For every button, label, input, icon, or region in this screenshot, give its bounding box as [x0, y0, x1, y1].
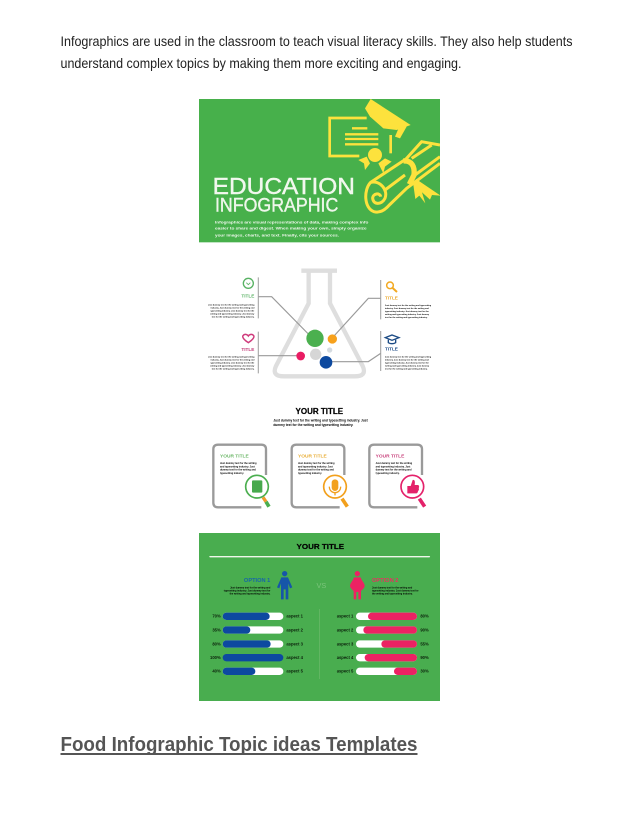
label: pink title [208, 347, 255, 371]
heading description: dummy text for the writing and typesetting industry. [273, 423, 353, 427]
card: green: dummy text for the writing and [220, 469, 256, 472]
percent and aspect labels: option 1: 70% [212, 614, 221, 619]
percent and aspect labels: option 2: 55% [420, 641, 429, 646]
comparison bars [210, 609, 429, 679]
percent and aspect labels: option 2: aspect 5 [337, 669, 354, 674]
percent and aspect labels: option 1: 40% [212, 669, 221, 674]
label: green title: typesetting industry. Just dummy text for the [211, 309, 255, 312]
divider [209, 556, 430, 557]
percent and aspect labels: option 1: aspect 5 [286, 669, 304, 674]
bars: option 2 [356, 613, 417, 675]
card: orange: Just dummy text for the writing [298, 462, 335, 465]
label: pink title: typesetting industry. Just dummy text for the [211, 362, 255, 365]
option 1 label: typesetting industry. Just dummy text for [224, 589, 270, 592]
icon: rosette [358, 148, 392, 173]
card: green: YOUR TITLE [220, 453, 249, 459]
label: orange title: typesetting industry. Just dummy text for the [385, 310, 430, 313]
bars: option 1 [223, 613, 283, 675]
option 2 label: Just dummy text for the writing and [372, 586, 413, 589]
title: education: EDUCATION [213, 173, 355, 199]
flask outline [275, 271, 364, 376]
label: green title: text for the writing and typesetting industry. [212, 315, 255, 318]
label: orange title: text for the writing and typesetting industry. [385, 316, 428, 319]
panel: education infographic banner [199, 99, 441, 242]
percent and aspect labels: option 1: 35% [212, 627, 221, 632]
intro text [60, 33, 572, 71]
connector lines [258, 277, 381, 373]
intro text: Infographics are used in the classroom to teach visual literacy skills. They also help students [60, 33, 572, 49]
percent and aspect labels: option 2 [337, 614, 429, 674]
card: pink [369, 445, 425, 507]
banner description: your images, charts, and text. Finally, cite your sources. [215, 233, 339, 237]
icon: certificate [330, 118, 391, 156]
label: green title [208, 294, 255, 318]
label: blue title: writing and typesetting industry. Just dummy [385, 364, 430, 367]
card: orange [292, 445, 347, 507]
subtitle: infographic: INFOGRAPHIC [215, 195, 338, 217]
percent and aspect labels: option 2: aspect 1 [337, 614, 354, 619]
banner description: easier to share and digest. When making your own, simply organize [215, 227, 367, 231]
label: green title: industry. Just dummy text for the writing and [211, 306, 255, 309]
intro text: understand complex topics by making them more exciting and engaging. [60, 55, 462, 71]
label: orange title: Just dummy text for the writing and typesetting [385, 304, 432, 307]
option 2 label [372, 578, 419, 595]
icon: graduation cap [365, 99, 411, 138]
comparison header [209, 542, 430, 599]
icon: blue graduation cap [385, 335, 399, 344]
heading: food infographic topic ideas templates: Food Infographic Topic ideas Templates [60, 733, 418, 756]
label: blue title: industry. Just dummy text for the writing and [385, 358, 429, 361]
option 2 label: the writing and typesetting industry. [372, 592, 413, 595]
card: pink: Just dummy text for the writing [376, 462, 413, 465]
percent and aspect labels: option 2: 90% [420, 655, 429, 660]
percent and aspect labels: option 1: 80% [212, 641, 221, 646]
panel: comparison option 1 vs option 2 [199, 533, 440, 701]
icon: green clock [243, 278, 253, 288]
option 1 label [224, 578, 271, 595]
heading description: Just dummy text for the writing and typesetting industry. Just [273, 419, 369, 423]
label: blue title: text for the writing and typesetting industry. [385, 367, 428, 370]
card: green: and typesetting industry. Just [220, 465, 255, 468]
option 1 label: the writing and typesetting industry. [230, 592, 271, 595]
label: orange title: industry. Just dummy text for the writing and [385, 307, 429, 310]
card: green: typesetting industry. [220, 472, 244, 475]
label: green title: Just dummy text for the writing and typesetting [208, 303, 255, 306]
card: pink: YOUR TITLE [376, 453, 405, 459]
heading: your title: YOUR TITLE [296, 542, 344, 551]
card: orange: and typesetting industry. Just [298, 465, 333, 468]
card: orange: dummy text for the writing and [298, 469, 334, 472]
percent and aspect labels: option 2: aspect 4 [337, 655, 354, 660]
flask bubbles [296, 330, 337, 369]
center divider [318, 609, 321, 679]
label: blue title: Just dummy text for the writing and typesetting [385, 355, 432, 358]
label: pink title: industry. Just dummy text for the writing and [211, 359, 255, 362]
panel: flask infographic [208, 271, 432, 376]
percent and aspect labels: option 1 [210, 614, 304, 674]
option 2 label: OPTION 2 [372, 578, 398, 584]
card: pink: dummy text for the writing and [376, 469, 412, 472]
icon: blue man [277, 571, 292, 599]
card: green [213, 445, 269, 507]
option 1 label: Just dummy text for the writing and [230, 586, 271, 589]
percent and aspect labels: option 1: 100% [210, 655, 221, 660]
percent and aspect labels: option 2: aspect 2 [337, 627, 354, 632]
label: green title: writing and typesetting industry. Just dummy [210, 312, 255, 315]
heading description [273, 419, 369, 427]
banner description: Infographics are visual representations of data, making complex info [215, 221, 369, 225]
percent and aspect labels: option 2: 30% [420, 669, 429, 674]
percent and aspect labels: option 1: aspect 1 [286, 614, 304, 619]
percent and aspect labels: option 2: 80% [420, 614, 429, 619]
vs label: VS [316, 581, 326, 590]
banner description [215, 221, 369, 237]
label: orange title [385, 295, 432, 319]
percent and aspect labels: option 2: aspect 3 [337, 641, 354, 646]
card: pink: typesetting industry. [376, 472, 400, 475]
icon: diploma scroll [366, 142, 441, 212]
card: pink: and typesetting industry. Just [376, 465, 411, 468]
label: blue title: typesetting industry. Just dummy text for the [385, 361, 430, 364]
label: orange title: writing and typesetting industry. Just dummy [385, 313, 430, 316]
label: pink title: Just dummy text for the writing and typesetting [208, 356, 255, 359]
card: green: Just dummy text for the writing [220, 462, 257, 465]
option 1 label: OPTION 1 [244, 578, 270, 584]
percent and aspect labels: option 2: 90% [420, 627, 429, 632]
label: green title: TITLE [241, 294, 254, 299]
label: pink title: writing and typesetting industry. Just dummy [210, 365, 255, 368]
percent and aspect labels: option 1: aspect 3 [286, 641, 304, 646]
card: orange: YOUR TITLE [298, 453, 327, 459]
icon: pink woman [350, 571, 365, 599]
icon: pink heart [243, 334, 254, 343]
percent and aspect labels: option 1: aspect 2 [286, 627, 304, 632]
label: blue title: TITLE [385, 347, 398, 352]
option 2 label: typesetting industry. Just dummy text for [372, 589, 419, 592]
label: orange title: TITLE [385, 295, 398, 300]
heading: your title: YOUR TITLE [295, 407, 344, 416]
panel: three magnifier cards [213, 407, 425, 507]
label: pink title: text for the writing and typesetting industry. [212, 368, 255, 371]
percent and aspect labels: option 1: aspect 4 [286, 655, 304, 660]
label: pink title: TITLE [241, 347, 254, 352]
label: blue title [385, 347, 432, 370]
icon: orange magnifier [387, 282, 397, 292]
card: orange: typesetting industry. [298, 472, 322, 475]
